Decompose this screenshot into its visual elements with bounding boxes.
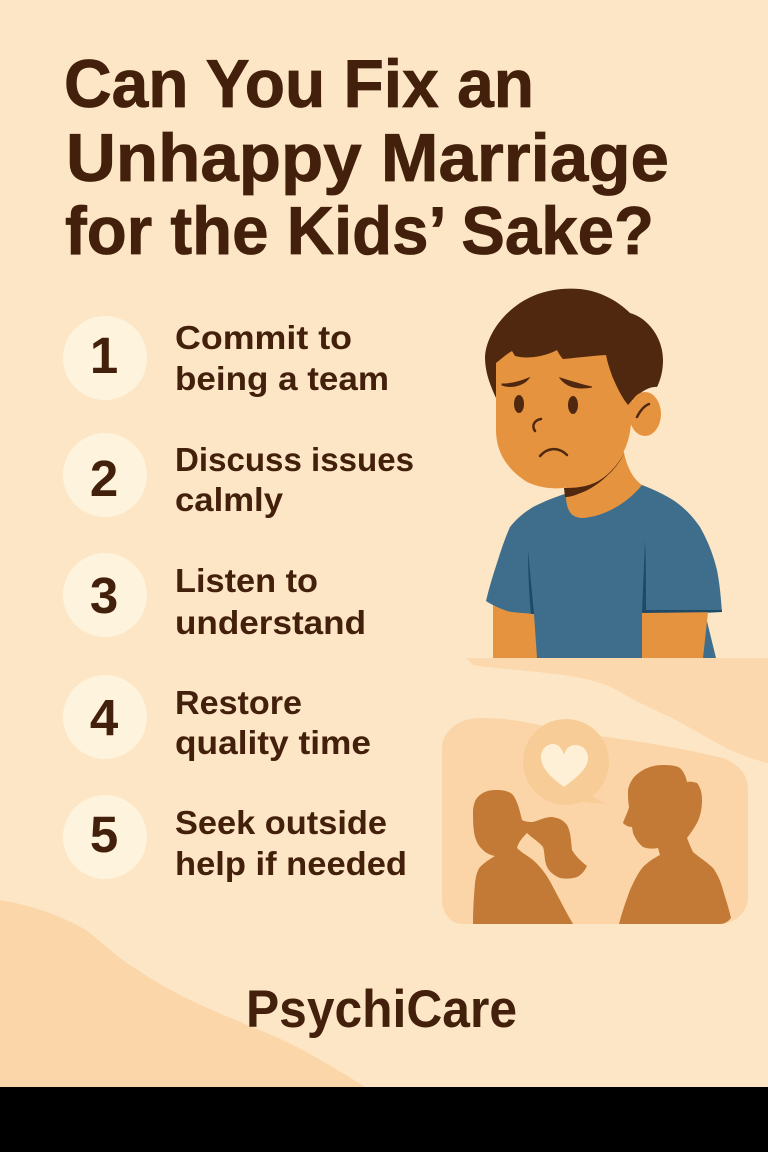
nose (533, 419, 541, 431)
left eyebrow (502, 378, 529, 386)
step 2: calmly (175, 481, 284, 518)
right eyebrow (560, 378, 592, 388)
left eye (514, 395, 524, 413)
step 1: 1 (90, 327, 118, 384)
panel backdrop (442, 718, 748, 924)
face (496, 340, 632, 488)
step 3: understand (175, 604, 366, 641)
right arm (642, 612, 708, 658)
ear (629, 392, 661, 436)
step 1: Commit to (175, 319, 352, 356)
illustration: couple panel (442, 718, 748, 924)
neck shadow (564, 452, 625, 497)
title: Unhappy Marriage (66, 120, 669, 196)
ear line (637, 404, 649, 417)
step 5 (63, 795, 407, 882)
step 5: help if needed (175, 845, 407, 882)
neck (566, 448, 642, 518)
step 2: Discuss issues (175, 441, 414, 478)
title (64, 46, 669, 269)
decorative wave: top right (466, 658, 768, 763)
illustration: sad boy (485, 289, 722, 658)
bubble tail (584, 795, 606, 804)
step 5: 5 (90, 806, 118, 863)
title: for the Kids’ Sake? (65, 193, 654, 269)
hair (485, 289, 663, 405)
woman silhouette (473, 790, 587, 924)
step 4: 4 (90, 689, 119, 746)
speech bubble with heart (523, 719, 609, 805)
numbered list (63, 316, 414, 882)
bottom letterbox bar (0, 1087, 768, 1152)
step 5: Seek outside (175, 804, 387, 841)
step 1: being a team (175, 360, 389, 397)
title: Can You Fix an (64, 46, 534, 122)
decorative wave: bottom left (0, 900, 365, 1087)
brand name: PsychiCare (246, 980, 517, 1039)
right eye (568, 396, 578, 414)
step 2 (63, 433, 414, 518)
step 3: Listen to (175, 562, 318, 599)
step 1 (63, 316, 389, 400)
step 4: Restore (175, 684, 302, 721)
heart (541, 744, 588, 787)
bubble (523, 719, 609, 805)
step 3 (63, 553, 366, 641)
step 4: quality time (175, 724, 371, 761)
step 4 (63, 675, 371, 761)
step 3: 3 (90, 567, 118, 624)
shirt (486, 485, 722, 658)
step 2: 2 (90, 450, 118, 507)
left arm (493, 604, 538, 658)
man silhouette (619, 765, 731, 924)
shirt sleeve folds (528, 540, 722, 614)
mouth (540, 449, 567, 456)
